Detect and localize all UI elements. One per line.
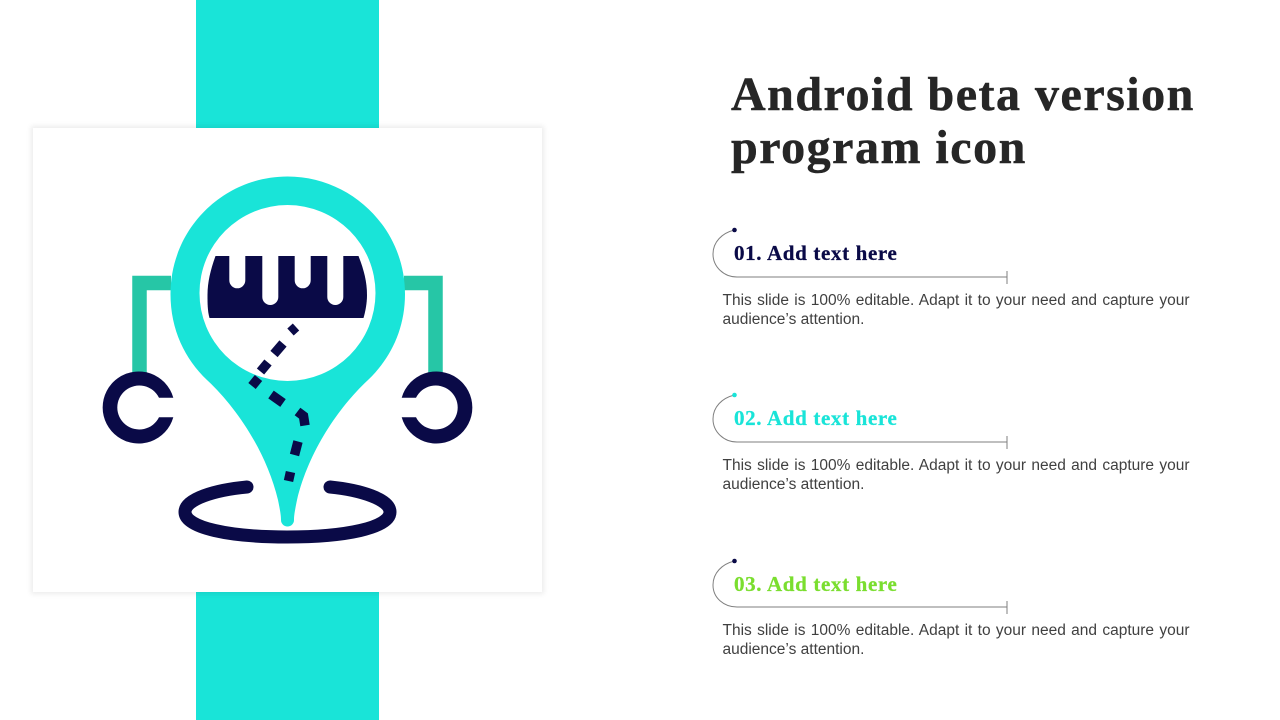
title: Android beta version xyxy=(731,68,1195,121)
item 01 xyxy=(712,228,1190,328)
item 02 arc line xyxy=(712,392,1008,449)
left ring xyxy=(103,372,173,443)
item 01 arc line xyxy=(712,228,1008,284)
item 03 xyxy=(712,558,1190,658)
right ring xyxy=(402,372,472,444)
icon: location pin with ruler and connectors xyxy=(102,176,472,544)
dashed route xyxy=(252,327,305,481)
white ruler notches xyxy=(229,256,343,305)
base ellipse xyxy=(185,487,390,537)
item 03 heading: 03. Add text here xyxy=(734,572,898,596)
right connector xyxy=(404,283,436,373)
ruler xyxy=(208,256,367,318)
item 02 xyxy=(712,392,1190,493)
pin body xyxy=(170,176,405,526)
item 02 heading: 02. Add text here xyxy=(734,406,898,430)
white icon panel xyxy=(33,128,542,592)
title: program icon xyxy=(731,121,1027,174)
item 03 arc line xyxy=(712,558,1008,614)
vertical teal band xyxy=(196,0,379,720)
item 01 text: This slide is 100% editable. Adapt it to your need and capture your audience’s attention. xyxy=(722,292,1190,328)
left connector xyxy=(140,283,171,373)
item 02 text: This slide is 100% editable. Adapt it to your need and capture your audience’s attention. xyxy=(722,457,1190,493)
item 01 heading: 01. Add text here xyxy=(734,241,898,265)
title xyxy=(731,68,1195,174)
item 03 text: This slide is 100% editable. Adapt it to your need and capture your audience’s attention. xyxy=(722,622,1190,658)
